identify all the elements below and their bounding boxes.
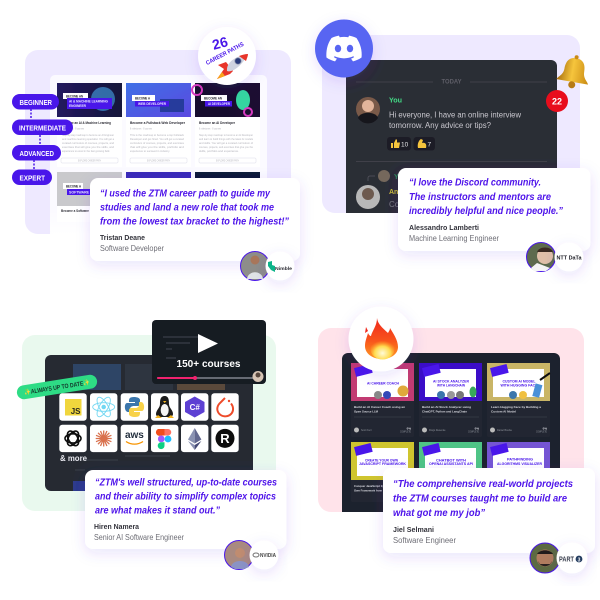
course card: AI developer: AI DEVELOPER xyxy=(208,102,231,106)
author xyxy=(409,223,499,243)
panel background xyxy=(22,335,276,511)
course card: AI developer: Become an AI Developer xyxy=(199,121,236,125)
project card: JavaScript framework: Own Framework from xyxy=(354,488,382,492)
author xyxy=(100,233,164,253)
testimonial card: Alessandro Lamberti xyxy=(398,168,590,251)
badge: 26 career paths: 26 xyxy=(210,33,230,53)
icon: bell xyxy=(555,52,593,91)
course card: AI developer: and learn to build things with the latest AI models xyxy=(199,137,254,141)
course card: AI developer: courses, projects, and exercises that give you the xyxy=(199,145,254,149)
quote: “I love the Discord community. xyxy=(409,178,541,188)
course card: web developer: 8 milestones · 8 courses xyxy=(130,126,153,130)
project card: custom AI model: WITH HUGGING FACE xyxy=(500,383,538,387)
company logo: NTT Data xyxy=(554,242,584,272)
project card: AI stock analyzer: AI STOCK ANALYZER xyxy=(433,379,469,383)
course card: AI developer: and skills. You will get a curated curriculum of xyxy=(199,141,253,145)
quote xyxy=(100,188,290,228)
project card: AI career coach: Open Source LLM xyxy=(354,410,378,414)
author xyxy=(94,522,184,542)
icon: Python xyxy=(121,393,148,421)
icon: play button xyxy=(198,334,218,353)
project card: AI stock analyzer: WITH LANGCHAIN xyxy=(437,383,465,387)
course library window xyxy=(45,355,253,491)
icon: OpenAI xyxy=(59,425,87,452)
icon: C sharp: C# xyxy=(190,403,200,412)
course card: web developer: This is the roadmap to become a top Fullstack xyxy=(130,133,185,137)
progress bar xyxy=(157,376,255,380)
career path browser window xyxy=(50,75,267,234)
course card: web developer: that will give you the skills, portfolio and xyxy=(130,145,185,149)
course card: web developer: EXPLORE CAREER PATH xyxy=(147,158,170,162)
panel: Discord community xyxy=(315,20,593,272)
quote: “The comprehensive real-world projects xyxy=(393,479,573,490)
notification badge: 22 xyxy=(546,90,568,112)
project card: AI career coach: AI CAREER COACH xyxy=(367,381,399,385)
course card: AI and machine learning: ENGINEER xyxy=(69,104,87,108)
project card: JavaScript framework: Conquer JavaScript by xyxy=(354,484,384,488)
panel background xyxy=(318,328,584,512)
course card: AI and machine learning: and machine learning specialist. You will get a xyxy=(62,137,115,141)
course card: software engineer xyxy=(57,172,122,222)
course card: AI and machine learning: 8 milestones · 8 courses xyxy=(62,126,85,130)
course card: web developer: Developer and get hired. You will get a curated xyxy=(130,137,185,141)
testimonial card: Jiel Selmani xyxy=(383,468,595,553)
quote: “I used the ZTM career path to guide my xyxy=(100,188,271,200)
icon: Rust: R xyxy=(220,431,230,446)
reply message: You xyxy=(394,174,407,181)
reply message xyxy=(356,170,421,209)
quote: are what makes it stand out.” xyxy=(95,506,221,516)
panel: courses xyxy=(16,320,286,570)
company logo: Nimble: Nimble xyxy=(275,266,292,271)
project card: custom AI model: 0% xyxy=(543,426,547,430)
course card: software engineer: Become a Software xyxy=(61,209,89,213)
project card: AI stock analyzer: 0% xyxy=(475,426,479,430)
pill: expert: EXPERT xyxy=(20,173,45,182)
panel: career paths xyxy=(12,27,300,280)
project card: AI stock analyzer: Diogo Resende xyxy=(429,429,446,432)
course card: web developer: BECOME A xyxy=(135,96,151,100)
message from You: tomorrow. Any advice or tips? xyxy=(389,121,492,130)
project card: custom AI model xyxy=(487,363,550,437)
author avatar: Tristan xyxy=(240,252,270,280)
pill: beginner: BEGINNER xyxy=(20,98,52,107)
course card: row two thumbnails xyxy=(126,172,260,180)
course card: AI developer: 8 milestones · 8 courses xyxy=(199,126,222,130)
technology icon grid xyxy=(59,393,239,452)
reply message: Congrats xyxy=(389,200,421,209)
course card: AI developer: EXPLORE CAREER PATH xyxy=(216,158,239,162)
message from You: You xyxy=(389,98,402,104)
icon: Claude xyxy=(90,425,117,452)
author avatar: Alessandro xyxy=(526,242,556,272)
project card: custom AI model: Daniel Bourke xyxy=(497,429,513,432)
author: Tristan Deane xyxy=(100,233,145,242)
label: and more: & more xyxy=(60,454,88,463)
panel background xyxy=(25,50,291,234)
tag: always up to date: ✨ALWAYS UP TO DATE✨ xyxy=(24,378,91,397)
quote: and their ability to simplify complex topics xyxy=(95,492,276,502)
icon: React xyxy=(90,393,117,421)
course card: web developer xyxy=(126,83,191,167)
quote: studies and land a new role that took me xyxy=(100,202,274,214)
project card: custom AI model: COMPLETE xyxy=(536,430,547,434)
project card: chatbot xyxy=(419,442,482,480)
project card: AI stock analyzer: ChatGPT, Python and LangChain xyxy=(422,410,467,414)
notification badge: 22: 22 xyxy=(552,96,562,106)
icon: JavaScript: JS xyxy=(71,407,81,416)
course card: web developer: curriculum of courses, projects, and exercises xyxy=(130,141,185,145)
author: Machine Learning Engineer xyxy=(409,234,499,243)
course card: software engineer: SOFTWARE xyxy=(69,190,89,194)
video player xyxy=(152,320,266,384)
project card: AI career coach: Build an AI Career Coach using an xyxy=(354,405,405,409)
icon: flame badge xyxy=(348,306,414,372)
quote xyxy=(393,479,573,519)
author avatar: Jiel xyxy=(530,543,560,573)
reaction: thumbs up 10: 10 xyxy=(401,142,409,148)
project card: AI career coach: COMPLETE xyxy=(400,430,411,434)
course card: AI and machine learning: curated curriculum of courses, projects, and xyxy=(62,141,115,145)
project card: AI career coach xyxy=(351,363,414,437)
author avatar: Hiren xyxy=(224,540,254,570)
course card: software engineer: BECOME A xyxy=(66,184,82,188)
chat window xyxy=(346,60,557,213)
author: Software Developer xyxy=(100,244,164,253)
icon: Ethereum xyxy=(181,425,208,452)
course card: AI and machine learning: BECOME AN xyxy=(66,94,84,98)
company logo: Part 3: 3 xyxy=(578,557,581,563)
course card: AI and machine learning: EXPLORE CAREER PATH xyxy=(78,158,101,162)
author: Jiel Selmani xyxy=(393,525,434,534)
company logo: NVIDIA: NVIDIA xyxy=(260,553,276,559)
icon: AWS: aws xyxy=(125,430,144,441)
course card: AI developer: skills, portfolio and experience. xyxy=(199,149,239,153)
project card: JavaScript framework: CREATE YOUR OWN xyxy=(365,458,398,462)
course card: AI developer: Step-by-step roadmap to become an AI Developer xyxy=(199,133,253,137)
project card: AI career coach: 0% xyxy=(407,426,411,430)
quote: what got me my job” xyxy=(393,508,486,519)
project card: pathfinding xyxy=(487,442,550,480)
course card: AI developer xyxy=(192,83,260,167)
course card: AI and machine learning: Become an AI & Machine Learning xyxy=(62,121,111,125)
icon: Figma xyxy=(151,425,178,452)
project card: AI stock analyzer: Build an AI Stock Analyzer using xyxy=(422,405,471,409)
author: Senior AI Software Engineer xyxy=(94,533,184,542)
course card: web developer: experience to succeed in industry. xyxy=(130,149,170,153)
quote xyxy=(95,478,277,516)
project card: pathfinding: PATHFINDING xyxy=(507,457,533,461)
course card: AI developer: BECOME AN xyxy=(204,96,223,100)
project card: chatbot: CHATBOT WITH xyxy=(436,458,466,462)
pill: advanced: ADVANCED xyxy=(20,149,54,158)
company logo: NVIDIA xyxy=(250,540,278,570)
icon: AWS xyxy=(121,425,148,452)
icon: JavaScript xyxy=(59,393,87,421)
author: Alessandro Lamberti xyxy=(409,223,479,232)
author: Software Engineer xyxy=(393,536,456,545)
project card: AI stock analyzer: COMPLETE xyxy=(468,430,479,434)
icon: C sharp xyxy=(181,393,208,421)
testimonial card: Tristan Deane xyxy=(90,178,300,261)
pill: intermediate: INTERMEDIATE xyxy=(19,123,66,132)
author: Hiren Namera xyxy=(94,522,140,531)
panel: portfolio projects xyxy=(318,306,595,574)
icon: Discord logo xyxy=(315,20,373,78)
project card: custom AI model: CUSTOM AI MODEL xyxy=(502,379,536,383)
quote: The instructors and mentors are xyxy=(409,192,551,203)
course card: web developer: Become a Fullstack Web Developer xyxy=(130,121,186,125)
message from You xyxy=(356,97,521,130)
tag: always up to date xyxy=(16,374,98,400)
message from You: Hi everyone, I have an online interview xyxy=(389,110,521,120)
icon: Linux penguin xyxy=(151,393,178,421)
course card: AI and machine learning xyxy=(57,83,122,167)
course card: AI and machine learning: Step-by-step roadmap to become an AI Engineer xyxy=(62,133,114,137)
badge: 26 career paths: CAREER PATHS xyxy=(205,42,245,67)
project card: custom AI model: Custom AI Model xyxy=(491,410,516,414)
chat window: TODAY xyxy=(442,80,462,86)
quote: incredibly helpful and nice people.” xyxy=(409,206,564,217)
icon: PyTorch xyxy=(211,393,239,421)
testimonial card: Hiren Namera xyxy=(85,470,286,549)
project card: chatbot: OPENAI ASSISTANTS API xyxy=(429,462,473,466)
project card: JavaScript framework: JAVASCRIPT FRAMEWORK xyxy=(359,462,406,466)
icon: Rust xyxy=(211,425,239,452)
course card: AI and machine learning: experience to excel in the fast growing field. xyxy=(62,149,110,153)
panel background xyxy=(322,35,580,213)
author xyxy=(393,525,456,545)
quote: from the lowest tax bracket to the highest!” xyxy=(100,216,290,228)
project card: custom AI model: Learn Hugging Face by Building a xyxy=(491,405,541,409)
career level pills xyxy=(12,94,73,185)
video caption: 150+ courses xyxy=(176,358,241,370)
icon: rocket xyxy=(217,54,248,79)
company logo: Part 3: PART xyxy=(559,556,575,564)
project card: AI career coach: Scott Kerr xyxy=(361,429,372,432)
project library window xyxy=(342,353,560,512)
project card: JavaScript framework xyxy=(351,442,414,502)
company logo: Part 3 xyxy=(556,542,588,574)
project card: AI stock analyzer xyxy=(419,363,482,437)
reaction: flexed arm 7 xyxy=(414,137,435,150)
company logo: NTT Data: NTT DaTa xyxy=(556,256,582,262)
quote: “ZTM's well structured, up-to-date courses xyxy=(95,478,277,488)
course card: AI and machine learning: exercises that will give you the skills, and xyxy=(62,145,115,149)
quote xyxy=(409,178,564,217)
reaction: thumbs up 10 xyxy=(387,137,411,150)
company logo: Nimble xyxy=(266,252,294,280)
quote: the ZTM courses taught me to build are xyxy=(393,494,567,504)
course card: web developer: WEB DEVELOPER xyxy=(138,102,167,106)
reply message: Andy xyxy=(389,189,407,196)
reaction: flexed arm 7: 7 xyxy=(428,142,432,148)
project card: pathfinding: ALGORITHMS VISUALIZER xyxy=(497,462,542,466)
badge: 26 career paths xyxy=(198,27,256,85)
course card: AI and machine learning: AI & MACHINE LEARNING xyxy=(69,99,109,103)
